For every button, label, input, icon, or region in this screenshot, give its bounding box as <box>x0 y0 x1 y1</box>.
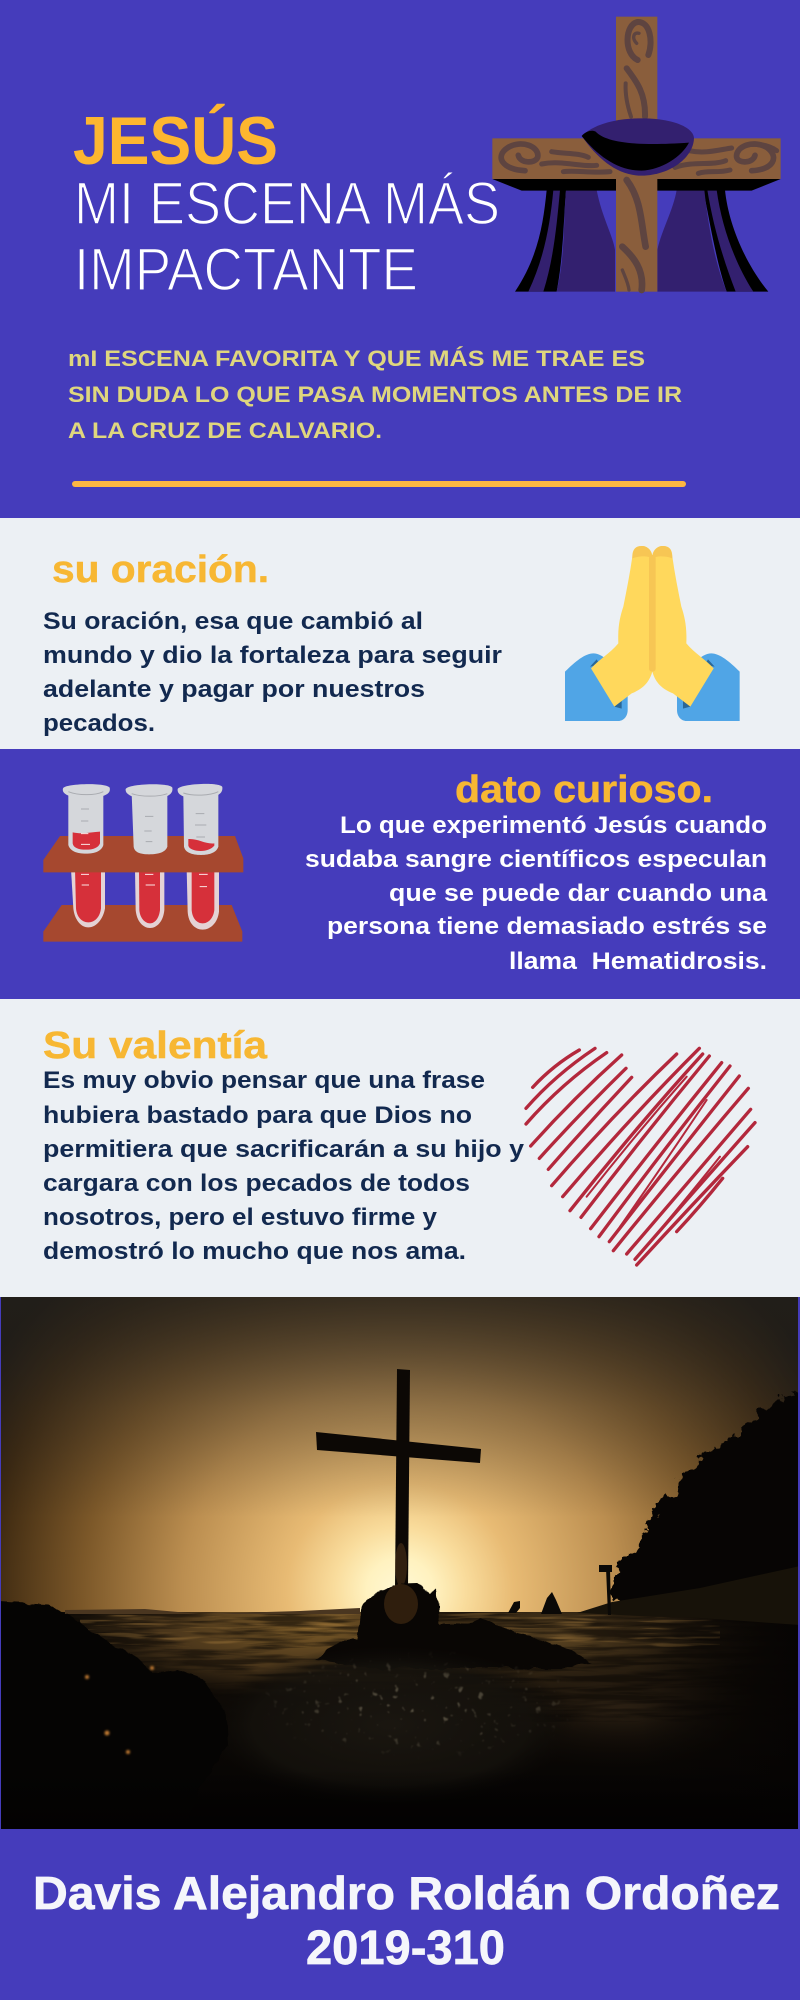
gold droplets <box>85 1666 154 1754</box>
text block: valentía body: demostró lo mucho que nos ama. <box>43 1238 466 1265</box>
sea <box>62 1612 798 1828</box>
shore road <box>577 1566 800 1625</box>
icon: wooden cross with purple drape <box>492 17 781 292</box>
text block: intro: SIN DUDA LO QUE PASA MOMENTOS ANTES DE IR <box>68 382 682 407</box>
cross silhouette <box>316 1369 481 1588</box>
text block: oración body: Su oración, esa que cambió al <box>43 608 423 635</box>
text block: oración body: mundo y dio la fortaleza para seguir <box>43 642 502 669</box>
photo: cross at sunset by the sea <box>0 1297 800 1840</box>
title: Jesús: JESÚS <box>73 103 278 179</box>
text block: oración body: adelante y pagar por nuestros <box>43 676 425 703</box>
text block: valentía body: Es muy obvio pensar que una frase <box>43 1067 485 1094</box>
text block: dato curioso body: persona tiene demasiado estrés se <box>327 913 767 940</box>
heading: mi escena más impactante: MI ESCENA MÁS <box>74 170 500 237</box>
splash foreground <box>254 1653 560 1786</box>
text block: valentía body: nosotros, pero el estuvo firme y <box>43 1204 438 1231</box>
text block: dato curioso body: que se puede dar cuando una <box>389 880 768 907</box>
distant shoreline <box>65 1608 360 1614</box>
panel: header background <box>0 0 800 518</box>
panel: su oración <box>0 518 800 749</box>
footer: author name: Davis Alejandro Roldán Ordoñez <box>33 1867 780 1919</box>
central rock <box>316 1583 590 1668</box>
sea stacks and lamp post <box>508 1565 612 1615</box>
panel: dato curioso <box>0 749 800 999</box>
icon: scribbled red heart <box>526 1048 755 1265</box>
text block: intro: A LA CRUZ DE CALVARIO. <box>68 418 382 443</box>
heading: su valentía: Su valentía <box>43 1025 268 1067</box>
panel: su valentía <box>0 999 800 1297</box>
right hillside silhouette <box>612 1388 800 1610</box>
heading: su oración: su oración. <box>52 549 269 591</box>
text block: dato curioso body: Lo que experimentó Jesús cuando <box>340 812 767 839</box>
text block: intro <box>68 346 682 443</box>
text block: dato curioso body: sudaba sangre científicos especulan <box>305 846 767 873</box>
left rocks <box>1 1601 228 1736</box>
text block: valentía body <box>43 1067 525 1265</box>
heading: mi escena más impactante <box>74 170 500 303</box>
text block: valentía body: cargara con los pecados de todos <box>43 1170 470 1197</box>
heading: dato curioso: dato curioso. <box>455 769 713 811</box>
text block: valentía body: permitiera que sacrificarán a su hijo y <box>43 1136 525 1163</box>
text block: valentía body: hubiera bastado para que Dios no <box>43 1102 472 1129</box>
footer: student id: 2019-310 <box>306 1922 505 1975</box>
heading: mi escena más impactante: IMPACTANTE <box>74 236 418 303</box>
text block: intro: mI ESCENA FAVORITA Y QUE MÁS ME TRAE ES <box>68 346 645 371</box>
text block: oración body <box>43 608 502 737</box>
text block: oración body: pecados. <box>43 710 155 737</box>
text block: dato curioso body <box>305 812 768 975</box>
icon: blood test tubes in a rack <box>43 784 243 942</box>
panel: footer <box>0 1829 800 2000</box>
text block: dato curioso body: llama Hematidrosis. <box>509 948 767 975</box>
foreground dark <box>0 1770 800 1829</box>
icon: praying hands <box>565 546 740 721</box>
divider line <box>72 481 686 487</box>
